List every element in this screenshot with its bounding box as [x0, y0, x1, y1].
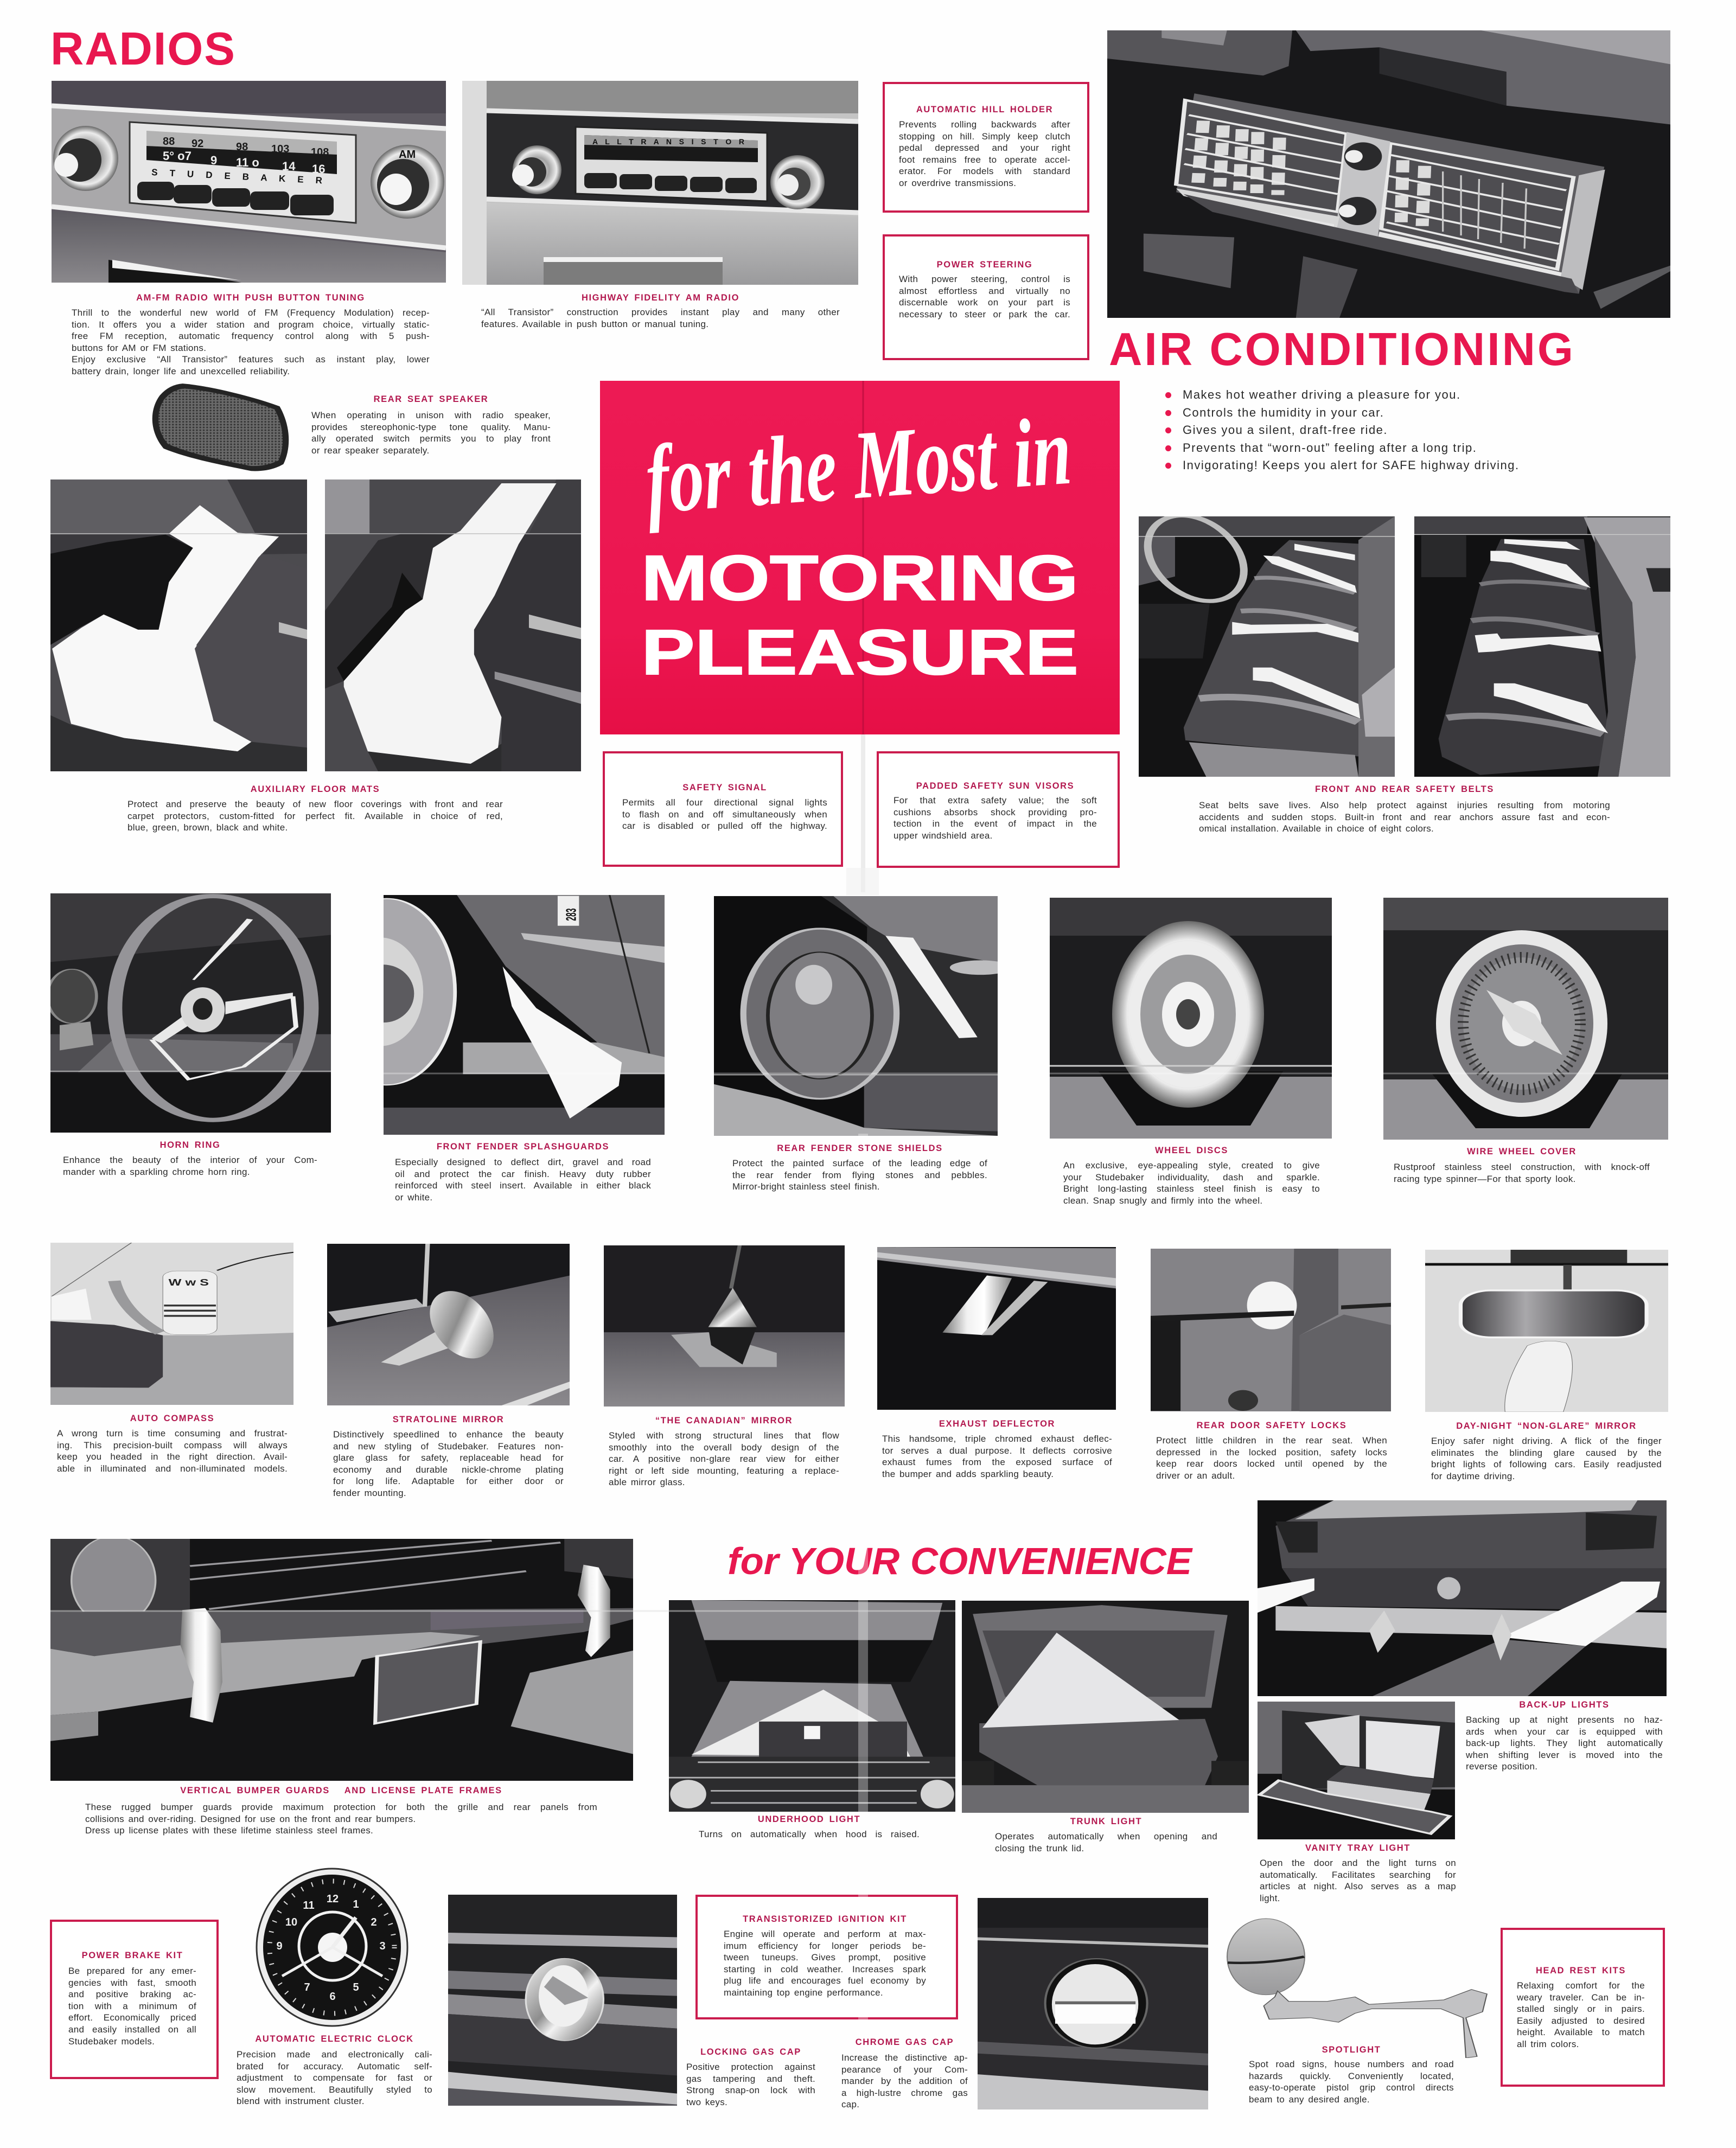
text: bumper guards: These rugged bumper guards provide maximum protection for both the grille and rear panels from: [85, 1802, 597, 1812]
text: vanity tray light: light.: [1260, 1893, 1280, 1903]
text: safety signal: Permits all four directional signal lights: [622, 797, 827, 808]
bullet list: air conditioning benefits: Invigorating! Keeps you alert for SAFE highway driving.: [1183, 458, 1520, 472]
illustration: automatic electric clock: 12: [327, 1893, 339, 1905]
illustration: automatic electric clock: 9: [276, 1940, 283, 1952]
text: spotlight: SPOTLIGHT: [1322, 2045, 1381, 2055]
photo: chrome gas cap: [978, 1898, 1208, 2109]
text: wire wheel cover: Rustproof stainless steel construction, with knock-off: [1394, 1162, 1650, 1172]
text: padded safety sun visors: tection in the event of impact in the: [893, 819, 1097, 829]
text: padded safety sun visors: [893, 780, 1097, 841]
text: exhaust deflector: tor serves a dual purpose. It deflects corrosive: [882, 1446, 1112, 1456]
text: safety belts: Seat belts save lives. Also help protect against injuries resulting from motoring: [1199, 800, 1610, 810]
text: exhaust deflector: [882, 1418, 1112, 1480]
text: stratoline mirror: for long life. Adaptable for either door or: [333, 1476, 564, 1486]
text: the canadian mirror: right or left side mounting, featuring a replace-: [609, 1466, 839, 1476]
text: spotlight: Spot road signs, house numbers and road: [1249, 2059, 1454, 2069]
text: rear fender stone shields: [732, 1142, 987, 1193]
text: auxiliary floor mats: carpet protectors, custom-fitted for perfect fit. Available in choice of red,: [127, 811, 503, 821]
text: power brake kit: effort. Economically priced: [68, 2012, 196, 2023]
text: wheel discs: WHEEL DISCS: [1155, 1146, 1228, 1155]
photo: rear door safety locks: [1151, 1249, 1391, 1411]
text: back-up lights: when shifting lever is moved into the: [1466, 1750, 1663, 1760]
text: auto compass: [57, 1412, 288, 1474]
text: automatic hill holder: erator. For models with standard: [899, 166, 1070, 176]
text: auxiliary floor mats: Protect and preserve the beauty of new floor coverings with front and rear: [127, 799, 503, 809]
text: spotlight: [1249, 2044, 1454, 2105]
text: bumper guards: Dress up license plates with these lifetime stainless steel frames.: [85, 1825, 373, 1836]
text: head rest kits: weary traveler. Can be in-: [1517, 1992, 1645, 2003]
photo: floor mat front: [50, 480, 307, 771]
text: auto compass: keep you headed in the right direction. Avail-: [57, 1452, 288, 1462]
text: padded safety sun visors: For that extra safety value; the soft: [893, 795, 1097, 806]
text: horn ring: HORN RING: [160, 1140, 220, 1150]
text: vanity tray light: automatically. Facilitates searching for: [1260, 1870, 1456, 1880]
text: chrome gas cap: Increase the distinctive ap-: [841, 2053, 968, 2063]
text: locking gas cap: Strong snap-on lock with: [686, 2085, 815, 2095]
text: chrome gas cap: CHROME GAS CAP: [856, 2037, 954, 2047]
text: auto compass: A wrong turn is time consuming and frustrat-: [57, 1428, 288, 1439]
text: non-glare mirror: for daytime driving.: [1431, 1471, 1515, 1481]
text: head rest kits: HEAD REST KITS: [1536, 1966, 1626, 1976]
photo: AM-FM radio: 108: [311, 146, 329, 158]
photo: locking gas cap: [448, 1895, 677, 2106]
text: the canadian mirror: able mirror glass.: [609, 1477, 685, 1487]
text: stratoline mirror: economy and durable nickle-chrome plating: [333, 1465, 564, 1475]
text: AM-FM radio: tion. It offers you a wider station and program choice, virtually static-: [72, 319, 430, 330]
illustration: automatic electric clock: 3: [379, 1940, 386, 1952]
panel: for the Most in Motoring Pleasure: [600, 381, 1120, 734]
photo: wire wheel cover: [1383, 898, 1668, 1140]
text: bumper guards: collisions and over-riding. Designed for use on the front and rear bumpers.: [85, 1814, 416, 1824]
photo: AM-FM radio: 5° o7: [163, 149, 192, 163]
text: stratoline mirror: [333, 1414, 564, 1499]
text: rear fender stone shields: Mirror-bright stainless steel finish.: [732, 1181, 880, 1192]
text: power brake kit: Be prepared for any emer-: [68, 1966, 196, 1976]
photo: AM-FM radio: 103: [271, 143, 289, 155]
text: automatic electric clock: [237, 2033, 432, 2107]
text: front fender splashguards: oil and protect the car finish. Heavy duty rubber: [395, 1169, 651, 1179]
photo: AM-FM radio: S T U D E B A K E R: [151, 167, 322, 186]
text: rear seat speaker: REAR SEAT SPEAKER: [374, 394, 488, 404]
box: padded safety sun visors: [877, 751, 1120, 868]
box: transistorized ignition kit: [695, 1895, 958, 2019]
text: automatic hill holder: or overdrive transmissions.: [899, 178, 1016, 188]
photo: AM-FM radio: [52, 81, 446, 283]
text: non-glare mirror: bright lights of following cars. Easily readjusted: [1431, 1459, 1662, 1469]
text: rear door safety locks: Protect little children in the rear seat. When: [1156, 1435, 1387, 1446]
text: underhood light: Turns on automatically when hood is raised.: [699, 1829, 920, 1839]
bullet list: air conditioning benefits: Makes hot weather driving a pleasure for you.: [1183, 388, 1461, 401]
text: auxiliary floor mats: blue, green, brown, black and white.: [127, 822, 288, 833]
text: automatic hill holder: pedal depressed and your right: [899, 143, 1070, 153]
illustration: automatic electric clock: 1: [353, 1898, 359, 1910]
photo: exhaust deflector: [877, 1247, 1116, 1410]
text: wire wheel cover: [1394, 1146, 1650, 1185]
text: highway fidelity: features. Available in push button or manual tuning.: [481, 319, 709, 329]
text: power brake kit: and positive braking ac-: [68, 1989, 196, 1999]
text: the canadian mirror: “THE CANADIAN” MIRROR: [655, 1416, 793, 1425]
photo: underhood light: [669, 1600, 955, 1812]
fold lines across the sheet: [50, 734, 1668, 2105]
photo: auto compass: W w S: [169, 1277, 209, 1288]
script line: for the Most in: [642, 397, 1075, 534]
photo: front fender splashguards: [384, 895, 665, 1135]
text: AM-FM radio: Enjoy exclusive “All Transistor” features such as instant play, lower: [72, 354, 430, 365]
text: back-up lights: reverse position.: [1466, 1761, 1537, 1772]
text: wheel discs: clean. Snap snugly and firmly into the wheel.: [1063, 1196, 1262, 1206]
text: locking gas cap: [686, 2046, 815, 2108]
text: wheel discs: your Studebaker individuality, dash and sparkle.: [1063, 1172, 1320, 1182]
text: power brake kit: and easily installed on all: [68, 2024, 196, 2035]
text: back-up lights: back-up lights. They light automatically: [1466, 1738, 1663, 1748]
photo: front fender splashguards: 283: [564, 909, 579, 921]
text: bumper guards: [85, 1785, 597, 1837]
text: horn ring: Enhance the beauty of the interior of your Com-: [63, 1155, 317, 1165]
bullet list: air conditioning benefits: Prevents that “worn-out” feeling after a long trip.: [1183, 440, 1477, 455]
text: wheel discs: Bright long-lasting stainless steel finish is easy to: [1063, 1184, 1320, 1194]
text: head rest kits: [1517, 1965, 1645, 2050]
text: rear seat speaker: provides stereophonic-type tone quality. Manu-: [311, 422, 551, 432]
text: safety signal: [622, 782, 827, 832]
photo: AM-FM radio: AM: [399, 149, 416, 161]
photo: auto compass: [50, 1243, 293, 1405]
text: vanity tray light: [1260, 1842, 1456, 1904]
text: chrome gas cap: mander by the addition of: [841, 2076, 968, 2086]
text: padded safety sun visors: upper windshield area.: [893, 830, 993, 841]
photo: trunk light: [962, 1601, 1249, 1813]
text: front fender splashguards: FRONT FENDER SPLASHGUARDS: [437, 1142, 609, 1152]
photo: The Canadian mirror: [604, 1245, 845, 1407]
text: automatic hill holder: foot remains free to operate accel-: [899, 155, 1070, 165]
text: vanity tray light: VANITY TRAY LIGHT: [1305, 1843, 1410, 1853]
text: non-glare mirror: [1431, 1420, 1662, 1482]
text: front fender splashguards: [395, 1141, 651, 1203]
text: head rest kits: Easily adjusted to desired: [1517, 2016, 1645, 2026]
text: automatic hill holder: AUTOMATIC HILL HOLDER: [916, 105, 1053, 114]
text: transistorized ignition kit: starting in cold weather. Increases spark: [724, 1964, 926, 1974]
photo: AM-FM radio: 98: [236, 141, 248, 153]
text: front fender splashguards: Especially designed to deflect dirt, gravel and road: [395, 1157, 651, 1167]
photo: wheel discs: [1050, 898, 1332, 1139]
text: safety signal: car is disabled or pulled off the highway.: [622, 821, 827, 831]
text: transistorized ignition kit: tween tuneups. Gives prompt, positive: [724, 1952, 926, 1962]
text: front fender splashguards: or white.: [395, 1192, 432, 1203]
text: the canadian mirror: car. A positive non-glare rear view for either: [609, 1454, 839, 1464]
text: head rest kits: stalled singly or in pairs.: [1517, 2004, 1645, 2014]
photo: AM-FM radio: 16: [312, 162, 325, 176]
text: power brake kit: [68, 1949, 196, 2047]
text: chrome gas cap: [841, 2036, 968, 2111]
text: transistorized ignition kit: plug life and encourages fuel economy by: [724, 1976, 926, 1986]
text: head rest kits: all trim colors.: [1517, 2039, 1579, 2049]
illustration: automatic electric clock: 6: [329, 1991, 336, 2003]
text: automatic electric clock: brated for accuracy. Automatic self-: [237, 2061, 432, 2072]
box: power brake kit: [50, 1920, 219, 2079]
text: automatic electric clock: AUTOMATIC ELECTRIC CLOCK: [255, 2034, 414, 2044]
text: power steering: With power steering, control is: [899, 274, 1070, 284]
text: stratoline mirror: Distinctively speedlined to enhance the beauty: [333, 1429, 564, 1440]
text: back-up lights: Backing up at night presents no haz-: [1466, 1715, 1663, 1725]
text: transistorized ignition kit: imum efficiency for longer periods be-: [724, 1941, 926, 1951]
text: transistorized ignition kit: [724, 1913, 926, 1999]
text: the canadian mirror: [609, 1415, 839, 1488]
PLEASURE: PLEASURE: [641, 617, 1078, 688]
illustration: spotlight: [1227, 1919, 1487, 2058]
text: back-up lights: [1466, 1699, 1663, 1773]
text: locking gas cap: Positive protection against: [686, 2062, 815, 2072]
text: power brake kit: tion with a minimum of: [68, 2001, 196, 2011]
text: exhaust deflector: EXHAUST DEFLECTOR: [939, 1419, 1055, 1429]
illustration: rear seat speaker: [152, 383, 289, 471]
text: power brake kit: Studebaker models.: [68, 2036, 155, 2047]
text: horn ring: mander with a sparkling chrome horn ring.: [63, 1167, 250, 1177]
text: rear seat speaker: ally operated switch permits you to play front: [311, 433, 551, 444]
text: safety signal: SAFETY SIGNAL: [682, 783, 767, 792]
text: AM-FM radio: [72, 292, 430, 378]
photo: AM-FM radio: 11 o: [236, 156, 259, 169]
text: bumper guards: VERTICAL BUMPER GUARDS AND LICENSE PLATE FRAMES: [180, 1786, 502, 1795]
bullet list: air conditioning benefits: Controls the humidity in your car.: [1183, 406, 1384, 419]
text: automatic hill holder: stopping on hill. Simply keep clutch: [899, 131, 1070, 142]
text: auto compass: AUTO COMPASS: [130, 1414, 214, 1423]
text: locking gas cap: LOCKING GAS CAP: [700, 2047, 801, 2057]
box: safety signal: [603, 751, 843, 867]
text: automatic hill holder: Prevents rolling backwards after: [899, 119, 1070, 130]
text: power steering: [899, 259, 1070, 320]
text: rear door safety locks: keep rear doors locked until opened by the: [1156, 1459, 1387, 1469]
text: horn ring: [63, 1139, 317, 1178]
text: spotlight: hazards quickly. Conveniently located,: [1249, 2071, 1454, 2081]
box: power steering: [883, 234, 1089, 360]
text: rear door safety locks: [1156, 1420, 1387, 1481]
box: head rest kits: [1501, 1928, 1665, 2087]
photo: back-up lights: [1258, 1500, 1667, 1696]
text: exhaust deflector: exhaust fumes from the exposed surface of: [882, 1457, 1112, 1467]
bullet list: air conditioning benefits: Gives you a silent, draft-free ride.: [1183, 423, 1388, 437]
text: power brake kit: gencies with fast, smooth: [68, 1978, 196, 1988]
text: the canadian mirror: smoothly into the overall body design of the: [609, 1442, 839, 1453]
text: locking gas cap: two keys.: [686, 2097, 727, 2107]
photo: front safety belts: [1139, 516, 1395, 777]
photo: stratoline mirror: [327, 1244, 570, 1405]
photo: air conditioning unit: STUDEBAKER: [1387, 240, 1444, 256]
illustration: automatic electric clock: 5: [353, 1981, 359, 1993]
text: automatic electric clock: slow movement. Beautifully styled to: [237, 2085, 432, 2095]
text: non-glare mirror: Enjoy safer night driving. A flick of the finger: [1431, 1436, 1662, 1446]
text: rear fender stone shields: Protect the painted surface of the leading edge of: [732, 1158, 987, 1168]
text: stratoline mirror: STRATOLINE MIRROR: [393, 1415, 504, 1424]
text: rear door safety locks: driver or an adult.: [1156, 1471, 1235, 1481]
text: chrome gas cap: pearance of your Com-: [841, 2064, 968, 2075]
text: rear door safety locks: depressed in the locked position, safety locks: [1156, 1447, 1387, 1457]
text: vanity tray light: articles at night. Also serves as a map: [1260, 1881, 1456, 1891]
illustration: automatic electric clock: [257, 1869, 407, 2026]
heading: AIR CONDITIONING: AIR CONDITIONING: [1109, 324, 1573, 375]
text: transistorized ignition kit: maintaining top engine performance.: [724, 1987, 883, 1998]
text: highway fidelity: [481, 292, 840, 330]
text: auto compass: ing. This precision-built compass will always: [57, 1440, 288, 1450]
text: power steering: discernable work on your part is: [899, 297, 1070, 308]
text: safety belts: omical installation. Available in choice of eight colors.: [1199, 823, 1434, 834]
text: stratoline mirror: and new styling of Studebaker. Features non-: [333, 1441, 564, 1452]
text: underhood light: [699, 1813, 920, 1840]
text: non-glare mirror: eliminates the blinding glare caused by the: [1431, 1448, 1662, 1458]
text: AM-FM radio: buttons for AM or FM stations.: [72, 343, 206, 353]
text: power steering: necessary to steer or park the car.: [899, 309, 1070, 319]
photo: highway fidelity AM radio: [462, 81, 858, 285]
text: trunk light: TRUNK LIGHT: [1070, 1817, 1142, 1826]
illustration: automatic electric clock: 11: [303, 1900, 315, 1912]
text: wheel discs: [1063, 1145, 1320, 1206]
photo: AM-FM radio: 92: [192, 138, 203, 150]
illustration: automatic electric clock: 2: [371, 1916, 377, 1928]
text: locking gas cap: gas tampering and theft.: [686, 2074, 815, 2084]
text: highway fidelity: “All Transistor” construction provides instant play and many other: [481, 307, 840, 317]
text: power steering: POWER STEERING: [937, 260, 1032, 270]
text: automatic electric clock: adjustment to compensate for fast or: [237, 2073, 432, 2083]
text: trunk light: [995, 1815, 1217, 1854]
bullet list: air conditioning benefits: [1165, 386, 1567, 474]
text: safety belts: FRONT AND REAR SAFETY BELTS: [1315, 784, 1494, 794]
text: front fender splashguards: reinforced with steel insert. Available in either black: [395, 1180, 651, 1191]
text: stratoline mirror: fender mounting.: [333, 1488, 406, 1498]
text: power steering: almost effortless and virtually no: [899, 286, 1070, 296]
text: chrome gas cap: cap.: [841, 2099, 859, 2109]
text: automatic hill holder: [899, 104, 1070, 189]
heading: RADIOS: RADIOS: [50, 23, 235, 75]
box: automatic hill holder: [883, 82, 1089, 213]
text: rear seat speaker: or rear speaker separately.: [311, 445, 430, 456]
photo: vertical bumper guards and license plate frame: [50, 1539, 633, 1781]
text: head rest kits: height. Available to match: [1517, 2027, 1645, 2037]
text: AM-FM radio: free FM reception, automatic frequency control along with 5 push-: [72, 331, 430, 341]
text: vanity tray light: Open the door and the light turns on: [1260, 1858, 1456, 1868]
photo: highway fidelity AM radio: A L L T R A N S I S T O R: [592, 137, 744, 146]
text: transistorized ignition kit: Engine will operate and perform at max-: [724, 1929, 926, 1939]
photo: horn ring: [50, 893, 331, 1133]
text: padded safety sun visors: cushions absorbs shock providing pro-: [893, 807, 1097, 817]
text: safety belts: [1199, 783, 1610, 835]
photo: vanity tray light: [1258, 1702, 1455, 1839]
text: spotlight: easy-to-operate pistol grip control directs: [1249, 2082, 1454, 2093]
text: back-up lights: ards when your car is equipped with: [1466, 1727, 1663, 1737]
text: automatic electric clock: blend with instrument cluster.: [237, 2096, 365, 2106]
text: wire wheel cover: racing type spinner—For that sporty look.: [1394, 1174, 1576, 1184]
text: chrome gas cap: a high-lustre chrome gas: [841, 2088, 968, 2098]
illustration: automatic electric clock: 7: [304, 1981, 310, 1993]
photo: floor mat rear: [325, 480, 581, 771]
photo: rear safety belts: [1414, 516, 1670, 777]
photo: AM-FM radio: 88: [163, 136, 175, 148]
text: rear fender stone shields: REAR FENDER STONE SHIELDS: [777, 1143, 943, 1153]
text: head rest kits: Relaxing comfort for the: [1517, 1980, 1645, 1991]
text: stratoline mirror: glare glass for safety, replaceable head for: [333, 1453, 564, 1463]
text: back-up lights: BACK-UP LIGHTS: [1519, 1700, 1610, 1710]
text: trunk light: Operates automatically when opening and: [995, 1831, 1217, 1842]
text: the canadian mirror: Styled with strong structural lines that flow: [609, 1430, 839, 1441]
heading: for YOUR CONVENIENCE: for YOUR CONVENIENCE: [727, 1540, 1193, 1582]
photo: day-night non-glare mirror: [1425, 1250, 1668, 1412]
text: safety belts: accidents and sudden stops. Built-in front and rear anchors assure fast and econ-: [1199, 812, 1610, 822]
MOTORING: MOTORING: [641, 542, 1078, 614]
illustration: automatic electric clock: 10: [285, 1916, 297, 1928]
text: transistorized ignition kit: TRANSISTORIZED IGNITION KIT: [743, 1914, 907, 1924]
text: rear fender stone shields: the rear fender from flying stones and pebbles.: [732, 1170, 987, 1180]
text: highway fidelity: HIGHWAY FIDELITY AM RADIO: [582, 293, 739, 303]
text: trunk light: closing the trunk lid.: [995, 1843, 1084, 1853]
text: automatic electric clock: Precision made and electronically cali-: [237, 2049, 432, 2060]
photo: AM-FM radio: 9: [210, 154, 217, 167]
text: wire wheel cover: WIRE WHEEL COVER: [1467, 1147, 1577, 1156]
photo: air conditioning unit: [1107, 30, 1670, 318]
text: exhaust deflector: the bumper and adds sparkling beauty.: [882, 1469, 1054, 1479]
photo: rear fender stone shields: [714, 896, 998, 1136]
text: non-glare mirror: DAY-NIGHT “NON-GLARE” MIRROR: [1456, 1421, 1637, 1431]
text: rear door safety locks: REAR DOOR SAFETY LOCKS: [1197, 1421, 1346, 1430]
text: spotlight: beam to any desired angle.: [1249, 2094, 1370, 2105]
text: AM-FM radio: AM-FM RADIO WITH PUSH BUTTON TUNING: [136, 293, 365, 303]
text: wheel discs: An exclusive, eye-appealing style, created to give: [1063, 1160, 1320, 1171]
text: exhaust deflector: This handsome, triple chromed exhaust deflec-: [882, 1434, 1112, 1444]
text: underhood light: UNDERHOOD LIGHT: [758, 1814, 860, 1824]
text: auxiliary floor mats: [127, 783, 503, 834]
text: AM-FM radio: battery drain, longer life and unexcelled reliability.: [72, 366, 290, 376]
text: rear seat speaker: When operating in unison with radio speaker,: [311, 410, 551, 420]
text: rear seat speaker: [311, 393, 551, 456]
text: padded safety sun visors: PADDED SAFETY SUN VISORS: [916, 781, 1074, 791]
text: power brake kit: POWER BRAKE KIT: [82, 1951, 183, 1960]
text: AM-FM radio: Thrill to the wonderful new world of FM (Frequency Modulation) recep-: [72, 308, 430, 318]
text: auto compass: able in illuminated and non-illuminated models.: [57, 1463, 288, 1474]
photo: AM-FM radio: 14: [282, 159, 296, 173]
text: auxiliary floor mats: AUXILIARY FLOOR MATS: [251, 784, 380, 794]
text: safety signal: to flash on and off simultaneously when: [622, 809, 827, 820]
